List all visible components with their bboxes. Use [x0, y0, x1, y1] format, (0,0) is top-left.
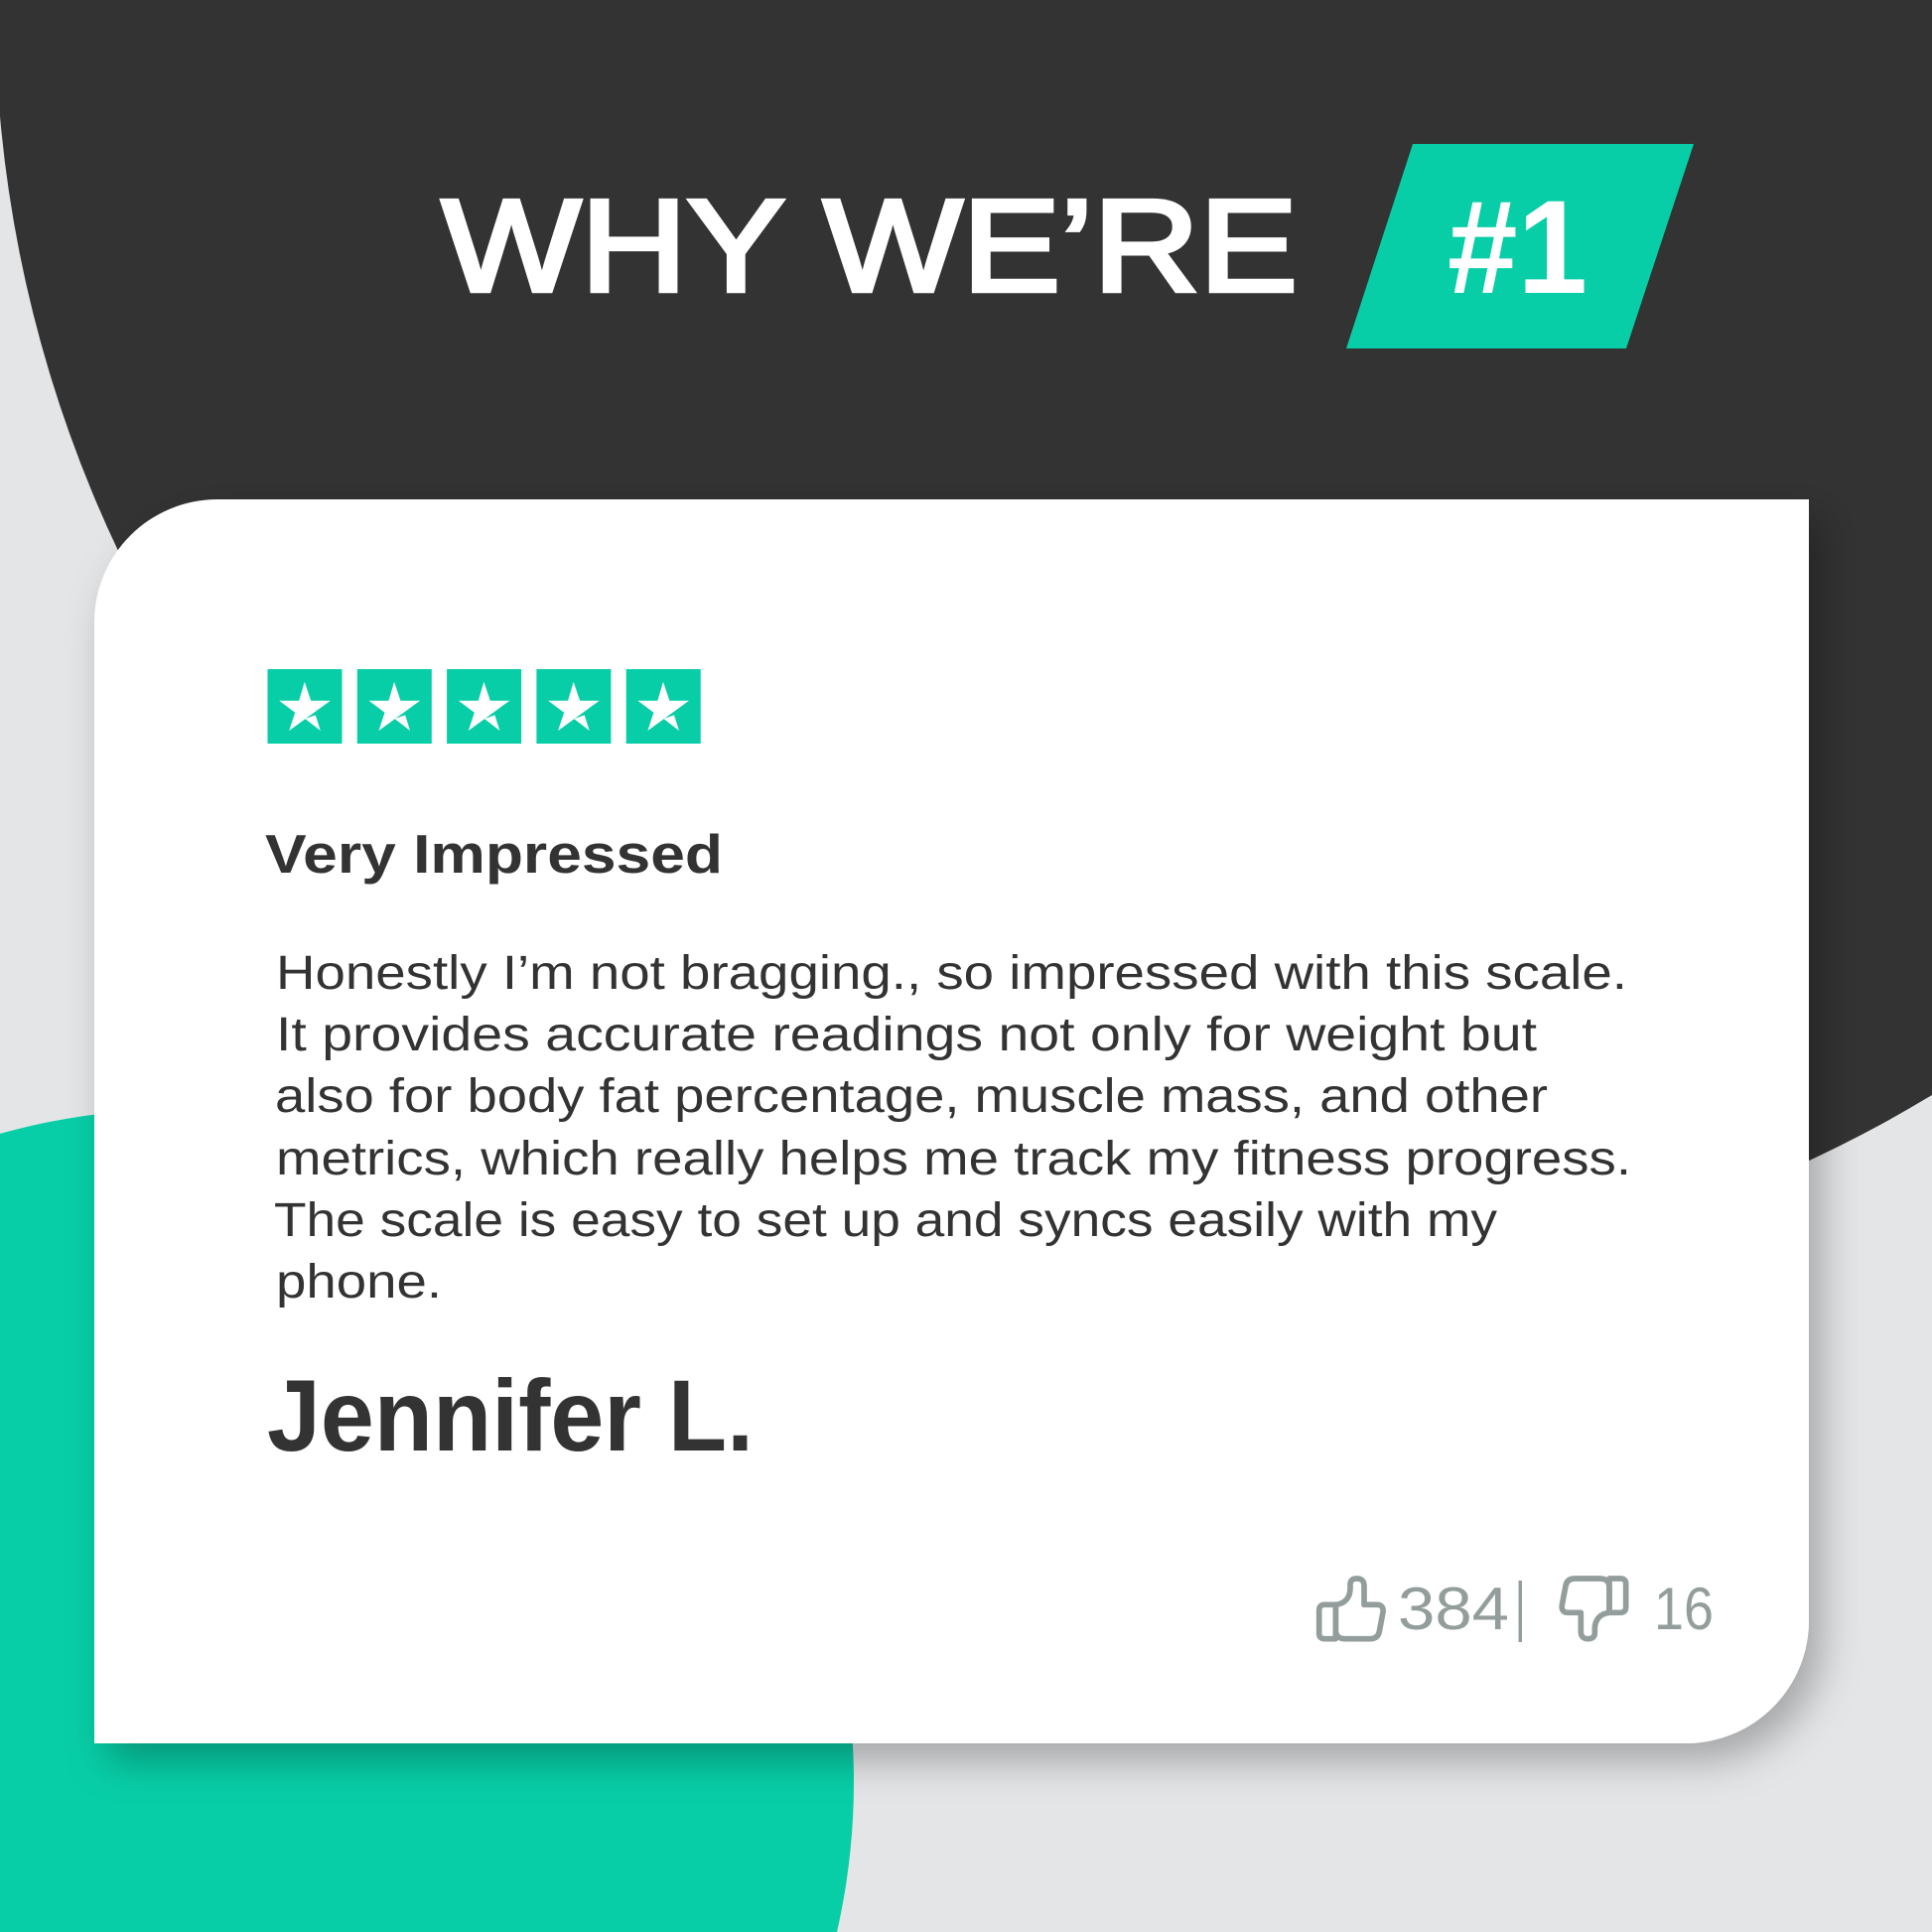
icon: star 2: [357, 669, 432, 744]
title badge: #1: #1: [1448, 174, 1587, 322]
star rating: [268, 669, 701, 744]
panel: review card: [94, 499, 1809, 1743]
reviewer name: Jennifer L.: [267, 1359, 754, 1472]
icon: star 1: [268, 669, 342, 744]
review body text: The scale is easy to set up and syncs easily with my: [274, 1194, 1497, 1247]
review body text: [274, 947, 1631, 1309]
upvote count: 384: [1398, 1576, 1509, 1642]
icon: star 4: [536, 669, 611, 744]
title text: why we're: WHY WE’RE: [442, 173, 1298, 319]
review heading: Very Impressed: [265, 823, 723, 885]
downvote count: 16: [1654, 1576, 1714, 1642]
icon: star 3: [447, 669, 521, 744]
icon: thumbs up: [1319, 1579, 1383, 1639]
review body text: Honestly I’m not bragging., so impressed with this scale.: [276, 947, 1627, 1000]
title: [442, 144, 1694, 348]
review body text: metrics, which really helps me track my fitness progress.: [276, 1133, 1631, 1185]
dark background circle: [0, 0, 1932, 1280]
green background circle: [0, 1109, 854, 1932]
separator bar: [1519, 1581, 1522, 1642]
review body text: It provides accurate readings not only for weight but: [276, 1009, 1537, 1061]
review body text: phone.: [276, 1256, 442, 1309]
title badge: #1: [1346, 144, 1694, 348]
review body text: also for body fat percentage, muscle mass, and other: [275, 1070, 1548, 1123]
icon: thumbs down: [1562, 1579, 1626, 1639]
vote counts: [1319, 1576, 1714, 1642]
icon: star 5: [626, 669, 701, 744]
